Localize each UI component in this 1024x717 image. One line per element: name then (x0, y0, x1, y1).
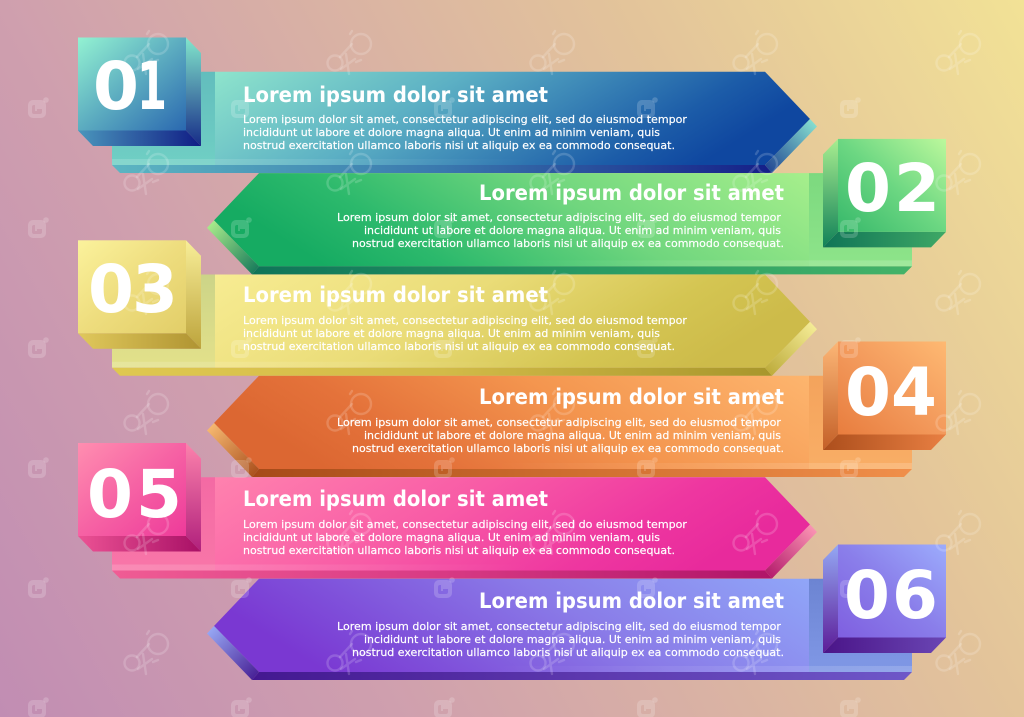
number cube 05 (78, 443, 201, 552)
body text 04: nostrud exercitation ullamco laboris nisi ut aliquip ex ea commodo consequat. (352, 442, 784, 455)
arrow band 03 (112, 274, 817, 376)
panel: step 05 (78, 443, 817, 578)
body text 03: incididunt ut labore et dolore magna aliqua. Ut enim ad minim veniam, quis (243, 327, 660, 340)
body text 01: nostrud exercitation ullamco laboris nisi ut aliquip ex ea commodo consequat. (243, 139, 675, 152)
number 01: 1 (137, 48, 167, 125)
body text 03: nostrud exercitation ullamco laboris nisi ut aliquip ex ea commodo consequat. (243, 340, 675, 353)
body text 05: Lorem ipsum dolor sit amet, consectetur adipiscing elit, sed do eiusmod tempor (243, 518, 687, 531)
body text 01: incididunt ut labore et dolore magna aliqua. Ut enim ad minim veniam, quis (243, 126, 660, 139)
number cube 01 (78, 38, 201, 146)
heading 05: Lorem ipsum dolor sit amet (243, 487, 548, 511)
body text 06: nostrud exercitation ullamco laboris nisi ut aliquip ex ea commodo consequat. (352, 646, 784, 659)
body text 03: Lorem ipsum dolor sit amet, consectetur adipiscing elit, sed do eiusmod tempor (243, 314, 687, 327)
body text 06: Lorem ipsum dolor sit amet, consectetur adipiscing elit, sed do eiusmod tempor (337, 620, 781, 633)
body text 05 (243, 518, 687, 557)
arrow band 05 (112, 477, 817, 578)
number 02: 02 (845, 150, 940, 227)
panel: step 04 (207, 342, 946, 477)
body text 02 (337, 211, 784, 250)
body text 06: incididunt ut labore et dolore magna aliqua. Ut enim ad minim veniam, quis (364, 633, 781, 646)
body text 04: Lorem ipsum dolor sit amet, consectetur adipiscing elit, sed do eiusmod tempor (337, 416, 781, 429)
body text 02: nostrud exercitation ullamco laboris nisi ut aliquip ex ea commodo consequat. (352, 237, 784, 250)
heading 01: Lorem ipsum dolor sit amet (243, 83, 548, 107)
body text 03 (243, 314, 687, 353)
number 06: 06 (844, 557, 938, 634)
number cube 04 (823, 342, 946, 450)
arrow band 06 (207, 579, 912, 680)
panel: step 01 (78, 38, 817, 173)
arrow band 02 (207, 173, 912, 274)
body text 04 (337, 416, 784, 455)
body text 06 (337, 620, 784, 659)
panel: step 02 (207, 139, 946, 274)
arrow band 04 (207, 376, 912, 477)
heading 02: Lorem ipsum dolor sit amet (479, 181, 784, 205)
number cube 06 (823, 544, 946, 653)
panel: step 03 (78, 240, 817, 376)
body text 05: incididunt ut labore et dolore magna aliqua. Ut enim ad minim veniam, quis (243, 531, 660, 544)
body text 05: nostrud exercitation ullamco laboris nisi ut aliquip ex ea commodo consequat. (243, 544, 675, 557)
number 03: 03 (88, 251, 178, 328)
panel: step 06 (207, 544, 946, 680)
heading 04: Lorem ipsum dolor sit amet (479, 385, 784, 409)
heading 03: Lorem ipsum dolor sit amet (243, 283, 548, 307)
number cube 03 (78, 240, 201, 349)
number 04: 04 (845, 354, 937, 431)
body text 02: Lorem ipsum dolor sit amet, consectetur adipiscing elit, sed do eiusmod tempor (337, 211, 781, 224)
body text 01 (243, 113, 687, 152)
arrow band 01 (112, 72, 817, 173)
body text 02: incididunt ut labore et dolore magna aliqua. Ut enim ad minim veniam, quis (364, 224, 781, 237)
body text 04: incididunt ut labore et dolore magna aliqua. Ut enim ad minim veniam, quis (364, 429, 781, 442)
number 01: 0 (93, 48, 139, 125)
number cube 02 (823, 139, 946, 247)
body text 01: Lorem ipsum dolor sit amet, consectetur adipiscing elit, sed do eiusmod tempor (243, 113, 687, 126)
number 05: 05 (87, 456, 182, 533)
heading 06: Lorem ipsum dolor sit amet (479, 589, 784, 613)
